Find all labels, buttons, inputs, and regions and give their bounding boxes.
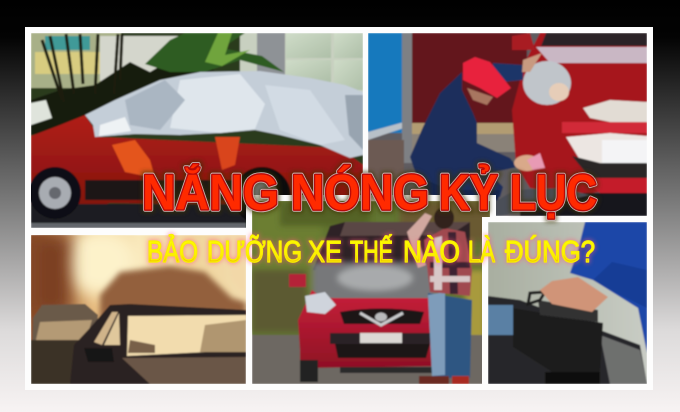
man plaid shirt and jeans bbox=[428, 293, 472, 378]
subtitle pink glow layer bbox=[147, 234, 595, 269]
title bright core layer: KỶ bbox=[439, 164, 498, 220]
subtitle pink glow layer: DƯỠNG bbox=[207, 234, 302, 269]
subtitle yellow text layer: XE bbox=[308, 234, 342, 269]
photo: hands servicing car battery bbox=[488, 222, 647, 384]
title pale outline layer: KỶ bbox=[439, 164, 498, 220]
subtitle pink glow layer: XE bbox=[308, 234, 342, 269]
title red fill layer: KỶ bbox=[439, 164, 498, 220]
subtitle pink glow layer: LÀ bbox=[468, 234, 495, 269]
subtitle pink glow layer: ĐÚNG? bbox=[505, 234, 595, 269]
title red fill layer: LỤC bbox=[510, 164, 597, 220]
ground bbox=[31, 203, 246, 223]
subtitle pink glow layer: NÀO bbox=[403, 234, 460, 269]
title bright core layer: NÓNG bbox=[291, 164, 429, 220]
photo: car windshield in harsh sunlight bbox=[31, 228, 246, 384]
title pale outline layer: NẮNG bbox=[142, 164, 279, 220]
car body bbox=[31, 114, 363, 206]
car bbox=[512, 33, 647, 195]
subtitle yellow text layer: THẾ bbox=[350, 234, 393, 269]
title dark glow layer: LỤC bbox=[510, 164, 597, 220]
title red fill layer bbox=[142, 164, 597, 220]
engine bay smoke bbox=[312, 262, 437, 304]
rear car bbox=[32, 303, 99, 341]
title dark glow layer bbox=[142, 164, 597, 220]
title bright core layer bbox=[142, 164, 597, 220]
title dark glow layer: KỶ bbox=[439, 164, 498, 220]
subtitle yellow text layer: BẢO bbox=[147, 234, 198, 269]
subtitle yellow text layer: NÀO bbox=[403, 234, 460, 269]
title red fill layer: NÓNG bbox=[291, 164, 429, 220]
subtitle pink glow layer: BẢO bbox=[147, 234, 198, 269]
subtitle pink glow layer: THẾ bbox=[350, 234, 393, 269]
title red fill layer: NẮNG bbox=[142, 164, 279, 220]
battery bbox=[513, 308, 603, 372]
title pale outline layer bbox=[142, 164, 597, 220]
subtitle yellow text layer: LÀ bbox=[468, 234, 495, 269]
photo: man checking overheated car bbox=[252, 201, 490, 384]
title: NẮNG NÓNG KỶ LỤC bbox=[142, 164, 597, 220]
blue sleeve bbox=[570, 222, 647, 353]
photo: car under silver sun cover bbox=[29, 33, 363, 228]
hands and sponge bbox=[514, 155, 540, 171]
subtitle: BẢO DƯỠNG XE THẾ NÀO LÀ ĐÚNG? bbox=[147, 234, 595, 269]
open hood bbox=[313, 222, 470, 270]
silver cover bbox=[85, 71, 363, 158]
title dark glow layer: NẮNG bbox=[142, 164, 279, 220]
title pale outline layer: LỤC bbox=[510, 164, 597, 220]
subtitle yellow text layer bbox=[147, 234, 595, 269]
road bbox=[252, 335, 490, 384]
main car bbox=[70, 304, 246, 384]
subtitle yellow text layer: DƯỠNG bbox=[207, 234, 302, 269]
title bright core layer: LỤC bbox=[510, 164, 597, 220]
subtitle yellow text layer: ĐÚNG? bbox=[505, 234, 595, 269]
mechanic navy coveralls bbox=[410, 72, 517, 200]
palm foliage bbox=[31, 60, 215, 135]
title bright core layer: NẮNG bbox=[142, 164, 279, 220]
title pale outline layer: NÓNG bbox=[291, 164, 429, 220]
mechanic red cap bbox=[463, 57, 511, 98]
photo: mechanic washing red car bbox=[368, 33, 647, 216]
wheels bbox=[29, 167, 81, 219]
hand bbox=[540, 277, 608, 312]
title dark glow layer: NÓNG bbox=[291, 164, 429, 220]
red car bbox=[297, 290, 432, 368]
